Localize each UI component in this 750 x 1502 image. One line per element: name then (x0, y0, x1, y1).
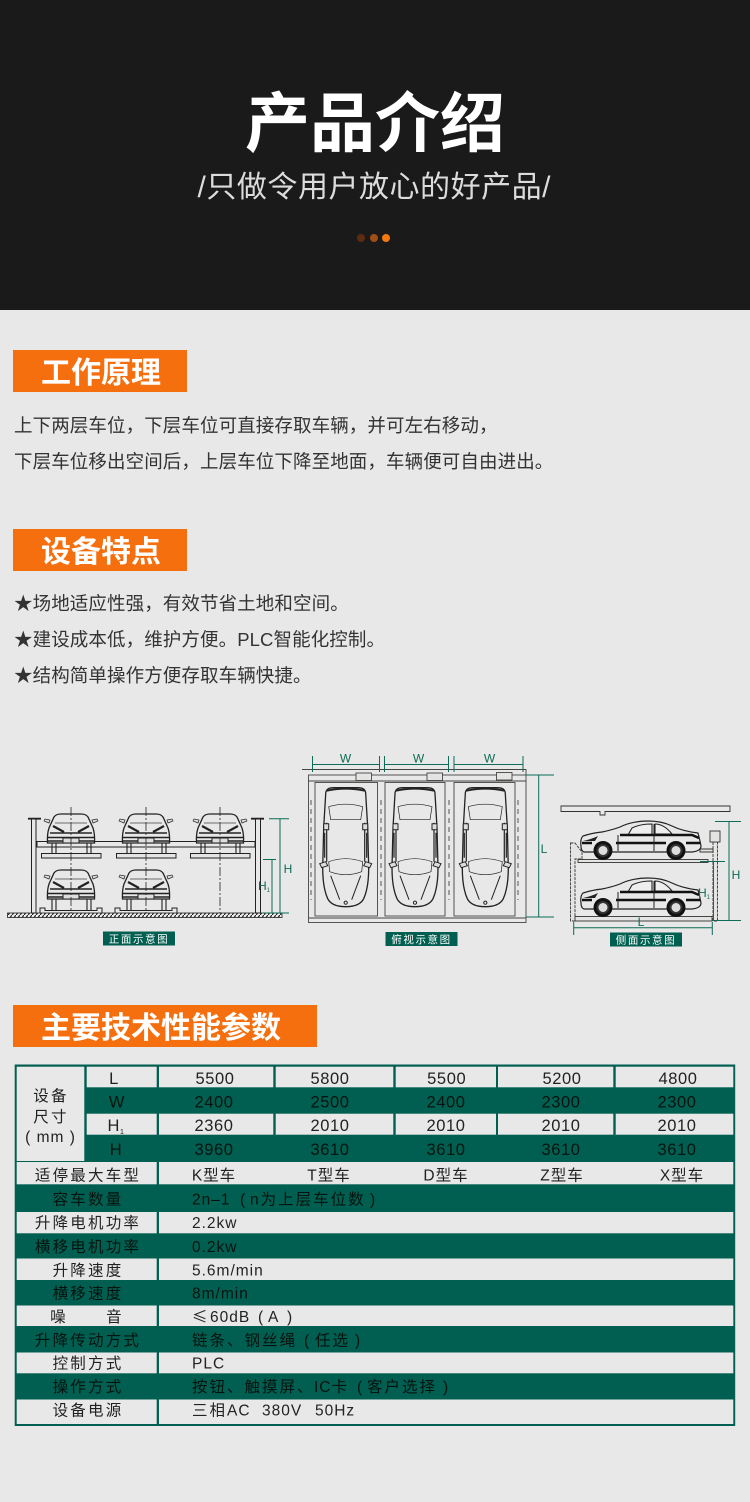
row: H1: 2010 (426, 1117, 466, 1135)
dimensions H and H1 (258, 819, 292, 913)
row: L: L (109, 1070, 119, 1088)
row: traverse motor power: 横移电机功率 (35, 1238, 141, 1256)
row: capacity: ( (240, 1192, 246, 1208)
row: capacity: 2n–1 (192, 1192, 230, 1208)
feature list: ★结构简单操作方便存取车辆快捷。 (14, 665, 312, 686)
row: max car type: K型车 (192, 1166, 236, 1184)
row: L: 5200 (542, 1070, 582, 1088)
row: lift speed: 5.6m/min (192, 1262, 264, 1280)
heading: main technical parameters: 主要技术性能参数 (41, 1012, 281, 1045)
motor boxes (356, 772, 512, 780)
row: H: 3610 (541, 1141, 581, 1159)
row: lift transmission: 升降传动方式 (35, 1332, 141, 1350)
row: noise: ) (287, 1309, 293, 1326)
row: L: 5500 (195, 1070, 235, 1088)
principle text: 下层车位移出空间后，上层车位下降至地面，车辆便可自由进出。 (14, 451, 553, 472)
dimensions H and H1: 1 (267, 888, 271, 894)
dimensions H and H1: H (284, 862, 292, 876)
heading: equipment features (13, 529, 187, 571)
equipment size label: 尺寸 (33, 1108, 69, 1126)
row: traverse speed (53, 1284, 249, 1302)
pagination dots (357, 234, 390, 242)
row: H: H (110, 1141, 122, 1159)
row: H: 3610 (310, 1141, 350, 1159)
row: lift motor power (35, 1214, 238, 1232)
row: noise: ( (258, 1309, 264, 1326)
ground (8, 913, 282, 918)
parameter table (15, 1064, 735, 1426)
row: operation method: IC卡 (314, 1378, 348, 1396)
row: control method (53, 1354, 225, 1372)
row: traverse motor power: 0.2kw (192, 1239, 238, 1256)
equipment size label (25, 1087, 76, 1146)
row: max car type: 适停最大车型 (35, 1166, 141, 1184)
row: power supply (53, 1402, 355, 1420)
dimensions H and H1: H (258, 879, 267, 893)
dimensions H, H1 and L: H (732, 868, 740, 882)
cars (581, 821, 701, 917)
dimensions H, H1 and L: 1 (707, 895, 711, 901)
row: operation method: 按钮、触摸屏、 (192, 1378, 315, 1396)
supports and pallets (40, 843, 250, 913)
equipment size label: ( mm ) (25, 1129, 76, 1146)
dark hero banner (0, 0, 750, 310)
row: capacity (53, 1190, 376, 1208)
row: lift transmission: ( (304, 1332, 310, 1350)
row: capacity: ) (370, 1192, 376, 1208)
row: max car type: X型车 (660, 1166, 704, 1184)
row: noise: 60dB (210, 1309, 250, 1326)
light cells (17, 1067, 733, 1424)
heading: equipment features: 设备特点 (41, 536, 161, 569)
row: power supply: 三相 (192, 1402, 227, 1420)
dimensions H, H1 and L: L (638, 915, 645, 929)
section: working principle (13, 350, 553, 472)
title: 产品介绍 (245, 87, 505, 160)
row: max car type (35, 1166, 704, 1184)
feature list: ★建设成本低，维护方便。PLC智能化控制。 (14, 629, 385, 650)
row: noise: 噪 (50, 1309, 68, 1326)
row: power supply: AC (227, 1402, 251, 1420)
row: W: 2400 (194, 1094, 234, 1112)
row: lift transmission: ) (355, 1332, 361, 1350)
row: H (110, 1141, 697, 1159)
row: W: 2500 (310, 1094, 350, 1112)
row: H: 3960 (194, 1141, 234, 1159)
row: traverse speed: 8m/min (192, 1286, 249, 1302)
row: L (109, 1070, 698, 1088)
row: control method: PLC (192, 1356, 225, 1372)
dimensions W and L: W (340, 752, 352, 766)
row: W (109, 1094, 697, 1112)
row: lift speed: 升降速度 (53, 1262, 123, 1280)
cars (320, 788, 511, 907)
row: operation method: 客户选择 (367, 1378, 437, 1396)
row: L: 5800 (310, 1070, 350, 1088)
row: lift motor power: 2.2kw (192, 1215, 238, 1232)
cars (44, 814, 247, 899)
row: lift transmission (35, 1332, 361, 1350)
row: max car type: Z型车 (540, 1166, 584, 1184)
row: max car type: T型车 (307, 1166, 351, 1184)
row: H1: 2010 (310, 1117, 350, 1135)
heading: main technical parameters (13, 1005, 317, 1047)
row: operation method: ) (443, 1379, 449, 1396)
principle text: 上下两层车位，下层车位可直接存取车辆，并可左右移动， (14, 415, 498, 436)
dimensions W and L: L (541, 842, 548, 856)
row: power supply: 380V (262, 1402, 302, 1420)
row: lift speed (53, 1262, 264, 1280)
row: noise (50, 1305, 293, 1327)
heading: working principle: 工作原理 (41, 357, 161, 390)
row: noise: A (268, 1309, 279, 1326)
equipment size label: 设备 (33, 1087, 69, 1105)
dimensions W and L: W (413, 752, 425, 766)
row: operation method: ( (357, 1379, 363, 1396)
row: max car type: D型车 (423, 1166, 469, 1184)
row: operation method: 操作方式 (53, 1378, 123, 1396)
row: H1: H (107, 1117, 120, 1135)
row: control method: 控制方式 (53, 1354, 123, 1372)
dimensions H, H1 and L: H (698, 886, 707, 900)
row: W: 2300 (657, 1094, 697, 1112)
feature list (14, 593, 385, 686)
principle text (14, 415, 553, 472)
row: capacity: 容车数量 (53, 1190, 123, 1208)
row: H1: 1 (120, 1129, 125, 1136)
table background (15, 1064, 735, 1426)
posts and beam (28, 819, 264, 913)
section: equipment features (13, 529, 385, 686)
row: H: 3610 (426, 1141, 466, 1159)
subtitle: /只做令用户放心的好产品/ (198, 171, 551, 204)
frame (302, 770, 526, 922)
diagram: front view (8, 807, 292, 946)
caption: 侧面示意图 (616, 934, 676, 946)
row: H: 3610 (657, 1141, 697, 1159)
row: L: 4800 (658, 1070, 698, 1088)
dimensions H, H1 and L (574, 822, 741, 935)
row: lift transmission: 链条、钢丝绳 (192, 1332, 297, 1350)
row: noise: ≤ (192, 1305, 209, 1327)
row: lift motor power: 升降电机功率 (35, 1214, 141, 1232)
diagram: side view (561, 806, 741, 946)
dimensions W and L: W (484, 752, 496, 766)
row: W: 2400 (426, 1094, 466, 1112)
row: W: W (109, 1094, 125, 1112)
heading: working principle (13, 350, 187, 392)
row: L: 5500 (427, 1070, 466, 1088)
row: lift transmission: 任选 (315, 1332, 350, 1350)
row: operation method (53, 1378, 449, 1396)
ceiling plate (561, 806, 730, 815)
row: H1: 2010 (657, 1117, 697, 1135)
row: power supply: 50Hz (315, 1402, 355, 1420)
row: capacity: n为上层车位数 (250, 1190, 366, 1208)
row: H1: 2010 (541, 1117, 581, 1135)
row: H1: 2360 (194, 1117, 234, 1135)
row: traverse speed: 横移速度 (53, 1284, 123, 1302)
row: H1 (107, 1117, 697, 1136)
dimensions W and L (312, 752, 554, 917)
frame and pallets (570, 831, 720, 921)
row: power supply: 设备电源 (53, 1402, 123, 1420)
caption: 俯视示意图 (391, 933, 452, 946)
feature list: ★场地适应性强，有效节省土地和空间。 (14, 593, 349, 614)
caption: 正面示意图 (109, 932, 169, 946)
diagram: top view (302, 752, 554, 946)
row: noise: 音 (106, 1308, 124, 1326)
row: traverse motor power (35, 1238, 238, 1256)
row: W: 2300 (541, 1094, 581, 1112)
